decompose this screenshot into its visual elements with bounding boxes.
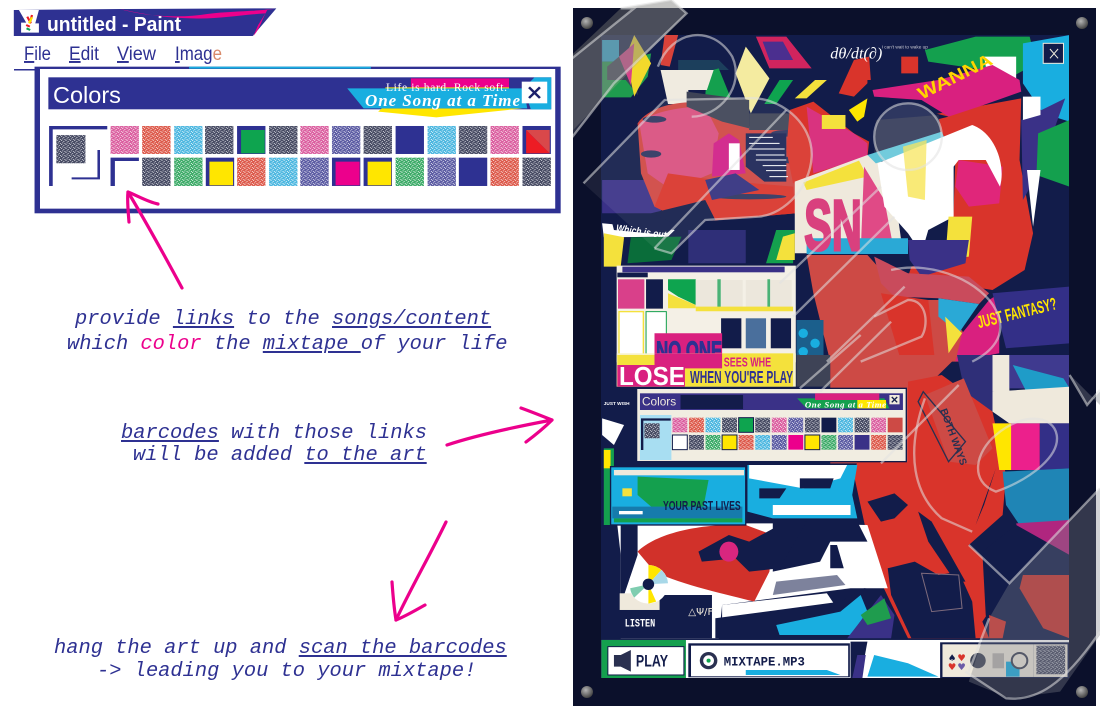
qr code (1036, 646, 1065, 674)
text: equations: dθ/dt(∂) (830, 45, 882, 62)
icon: spotify (970, 653, 986, 668)
tagline: Life is hard. Rock soft. (386, 82, 507, 94)
poster word: SN (804, 186, 862, 266)
text: just wish: JUST WISH (604, 401, 630, 406)
selected color swatch (49, 126, 107, 186)
window: media player (611, 467, 746, 525)
bolt: bottom left (581, 686, 593, 698)
icons: suits (948, 654, 965, 670)
text: sees when: SEES WHE (724, 354, 771, 369)
arrow: down to scan (392, 522, 446, 620)
icons: suits: ♥ (948, 662, 956, 673)
text block: hang the art: hang the art up and scan the barcodes (54, 637, 507, 660)
icon: cd player (620, 565, 668, 610)
banner script: One Song at a Time (365, 91, 520, 110)
collage lower half (601, 353, 1070, 679)
acrylic overlay shapes (570, 0, 1100, 699)
window: colors in poster: One Song at a Time (805, 400, 886, 410)
poster frame (573, 8, 1096, 706)
panel: colors window (35, 67, 561, 213)
text block: barcodes: barcodes with those links (121, 422, 427, 445)
menu bar: Edit (69, 43, 100, 65)
text block: which color: which color the mixtape of your life (67, 333, 508, 356)
text block: added to art: will be added to the art (133, 444, 427, 467)
text: when playing: WHEN YOU'RE PLAY (690, 367, 793, 387)
panel: poster collage (601, 35, 1070, 679)
close button (522, 82, 547, 103)
icon: compass (1012, 653, 1027, 668)
window: colors in poster: Colors (642, 396, 676, 409)
arrow: to swatch (128, 192, 182, 288)
overlay lower (800, 322, 1100, 699)
arrow: to the art (447, 408, 552, 445)
bolt: bottom right (1076, 686, 1088, 698)
overlay upper (570, 0, 1000, 362)
window: solitaire (617, 266, 796, 362)
title text: untitled - Paint (47, 13, 181, 36)
icon: speaker (614, 650, 631, 672)
collage upper half (602, 35, 1070, 365)
menu bar: File (24, 43, 51, 65)
text block: leading to mixtape: -> leading you to your mixtape! (97, 660, 476, 683)
icon: file (992, 653, 1004, 668)
text: lose when you're playing: LOSE (619, 361, 685, 391)
text: which is out: Which is out (615, 223, 667, 242)
icon: paint bucket (19, 10, 39, 33)
icon: cd (700, 652, 717, 669)
title bar: colors (48, 77, 551, 109)
bolt: top right (1076, 17, 1088, 29)
icons: suits: ♥ (957, 653, 966, 664)
swatch row 1 (111, 126, 551, 154)
window: media player: YOUR PAST LIVES (663, 498, 741, 513)
text block: provide links: provide links to the songs/content (75, 308, 491, 331)
icons: suits: ♠ (948, 653, 956, 664)
swatch row 2 (111, 158, 551, 186)
banner: one song at a time (347, 77, 551, 117)
text: both ways: BOTH WAYS (937, 407, 968, 467)
panel: paint title bar (14, 8, 276, 36)
menu bar: View (117, 43, 157, 65)
window: colors in poster (637, 388, 906, 462)
text: listen: LISTEN (625, 619, 655, 631)
bottom bar (601, 640, 1070, 679)
menu bar (14, 43, 222, 70)
window heading: Colors (53, 82, 121, 108)
text: no one sees: NO ONE (656, 335, 722, 365)
menu bar: Image (175, 43, 222, 65)
text: wanna yours: WANNA (914, 49, 996, 104)
icons: suits: ♥ (957, 662, 966, 673)
bolt: top left (581, 17, 593, 29)
text: math scribble: △Ψ/F (688, 607, 713, 618)
text: filename: MIXTAPE.MP3 (724, 655, 805, 670)
text: play: PLAY (636, 652, 668, 671)
text: wake up line: I can't wait to wake up (882, 45, 928, 50)
